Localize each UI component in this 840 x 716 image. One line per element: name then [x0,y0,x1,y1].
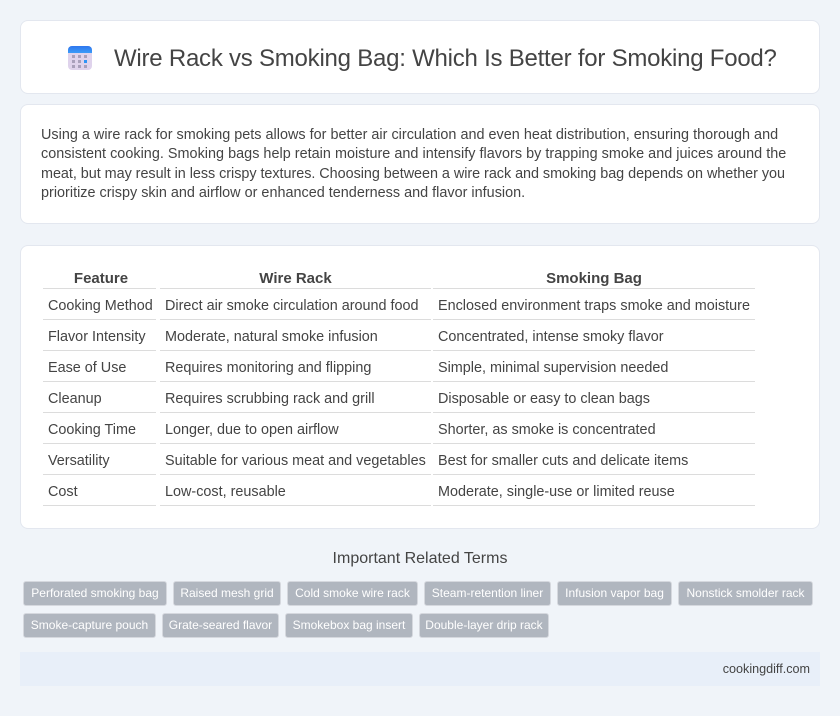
title: Wire Rack vs Smoking Bag: Which Is Better for Smoking Food? [114,45,777,72]
comparison table: Longer, due to open airflow [165,422,339,438]
comparison table: Enclosed environment traps smoke and moisture [438,298,750,314]
comparison table: Suitable for various meat and vegetables [165,453,426,469]
text block: summary: consistent cooking. Smoking bags help retain moisture and intensify flavors by trapping smoke and juices around the [41,146,786,162]
comparison table: Simple, minimal supervision needed [438,360,668,376]
comparison table: Direct air smoke circulation around food [165,298,419,314]
related term tags [23,581,813,638]
comparison table: Shorter, as smoke is concentrated [438,422,656,438]
related term tags: Smoke-capture pouch [31,618,148,632]
comparison table: Disposable or easy to clean bags [438,391,650,407]
related term tags: Steam-retention liner [432,586,543,600]
comparison table: Moderate, single-use or limited reuse [438,484,675,500]
comparison table: Cleanup [48,391,102,407]
footer bar [20,652,820,686]
related term tags: Double-layer drip rack [425,618,543,632]
comparison table: Low-cost, reusable [165,484,286,500]
comparison table: Smoking Bag [546,270,642,287]
panel: summary [20,104,820,224]
related term tags: Nonstick smolder rack [686,586,805,600]
panel: title header [20,20,820,94]
comparison table: Cooking Time [48,422,136,438]
comparison table: Cost [48,484,78,500]
related term tags: Grate-seared flavor [169,618,272,632]
text block: summary: meat, but may result in less crispy textures. Choosing between a wire rack and smoking bag depends on whether you [41,166,785,182]
comparison table: Versatility [48,453,110,469]
comparison table: Cooking Method [48,298,153,314]
comparison table: Ease of Use [48,360,126,376]
text block: summary [41,127,786,201]
comparison table: Best for smaller cuts and delicate items [438,453,688,469]
text block: summary: prioritize crispy skin and airflow or enhanced tenderness and flavor infusion. [41,185,525,201]
comparison table: Flavor Intensity [48,329,146,345]
comparison table: Requires monitoring and flipping [165,360,371,376]
comparison table: Feature [74,270,128,287]
related term tags: Infusion vapor bag [565,586,664,600]
related term tags: Smokebox bag insert [293,618,405,632]
related term tags: Cold smoke wire rack [295,586,410,600]
comparison table: Wire Rack [259,270,332,287]
related term tags: Perforated smoking bag [31,586,159,600]
related term tags: Raised mesh grid [180,586,274,600]
comparison table: Requires scrubbing rack and grill [165,391,375,407]
comparison table [43,270,755,506]
text block: summary: Using a wire rack for smoking pets allows for better air circulation and even heat distribution, ensuring thorough and [41,127,778,143]
footer source text: cookingdiff.com [723,662,810,676]
icon: calendar [68,46,92,70]
panel: comparison table [20,245,820,529]
heading: related terms: Important Related Terms [333,550,507,567]
comparison table: Moderate, natural smoke infusion [165,329,378,345]
comparison table: Concentrated, intense smoky flavor [438,329,664,345]
